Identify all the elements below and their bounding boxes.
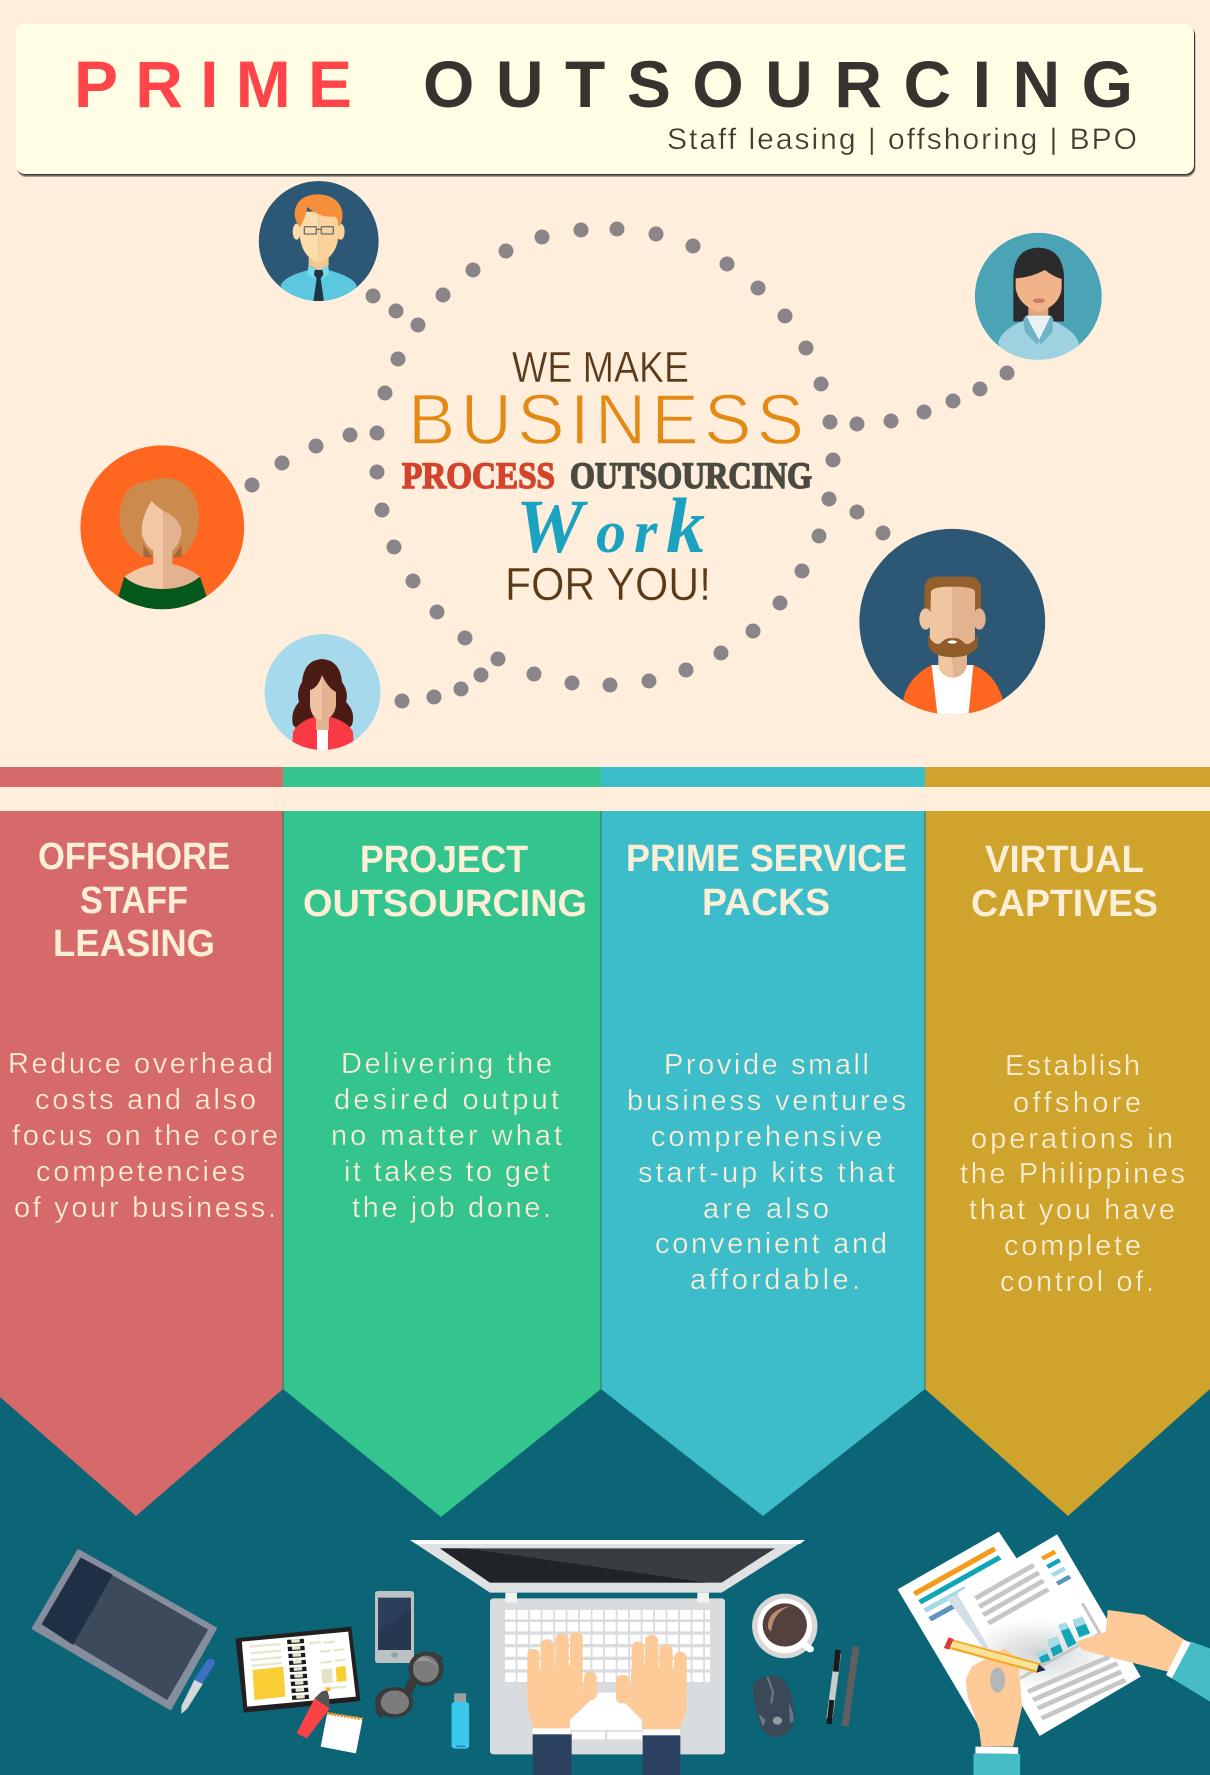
body: offshore staff leasing: competencies bbox=[36, 1156, 245, 1188]
column dividers bbox=[283, 811, 925, 1389]
slogan: work: k bbox=[666, 482, 705, 569]
subtitle: Staff leasing | offshoring | BPO bbox=[667, 123, 1137, 156]
heading: project outsourcing: PROJECT bbox=[360, 839, 528, 881]
avatar: woman top right bbox=[975, 233, 1102, 360]
body: prime service packs: comprehensive bbox=[651, 1121, 882, 1153]
body: prime service packs: start-up kits that bbox=[638, 1157, 895, 1189]
heading: offshore staff leasing: OFFSHORE bbox=[38, 836, 230, 878]
body: project outsourcing: no matter what bbox=[331, 1120, 562, 1152]
slogan: work: r bbox=[634, 499, 658, 565]
body: prime service packs: are also bbox=[703, 1193, 829, 1225]
body: virtual captives: control of. bbox=[1000, 1266, 1154, 1298]
slogan: work: W bbox=[516, 485, 589, 569]
slogan: we make: WE MAKE bbox=[512, 343, 689, 392]
body: virtual captives: offshore bbox=[1013, 1087, 1141, 1119]
body: prime service packs: affordable. bbox=[690, 1264, 860, 1296]
body: virtual captives: that you have bbox=[969, 1194, 1175, 1226]
body: project outsourcing: the job done. bbox=[352, 1192, 551, 1224]
right hand bbox=[616, 1635, 687, 1729]
body: prime service packs: convenient and bbox=[655, 1228, 887, 1260]
panel: project outsourcing bbox=[283, 811, 601, 1517]
body: virtual captives bbox=[960, 1050, 1185, 1298]
icon: paper front sheet with chart bbox=[957, 1534, 1141, 1736]
heading: offshore staff leasing: LEASING bbox=[53, 923, 215, 965]
icon: mouse bbox=[753, 1676, 795, 1737]
body: offshore staff leasing: focus on the core bbox=[12, 1120, 278, 1152]
icon: sunglasses bbox=[375, 1652, 443, 1718]
heading: offshore staff leasing: STAFF bbox=[80, 880, 188, 922]
body: project outsourcing: Delivering the bbox=[341, 1048, 552, 1080]
heading: virtual captives: CAPTIVES bbox=[971, 883, 1158, 925]
panel: prime service packs bbox=[601, 811, 925, 1516]
icon: marker bbox=[297, 1687, 331, 1738]
heading: virtual captives: VIRTUAL bbox=[985, 839, 1144, 881]
icon: notebook bbox=[235, 1627, 360, 1713]
body: offshore staff leasing: costs and also bbox=[35, 1084, 256, 1116]
icon: usb stick bbox=[452, 1693, 469, 1749]
heading: virtual captives bbox=[971, 839, 1158, 925]
heading: prime service packs: PACKS bbox=[702, 882, 830, 924]
colour band bbox=[0, 767, 1210, 787]
title bbox=[74, 47, 1133, 121]
icon: right hand holding paper bbox=[1077, 1610, 1210, 1702]
body: offshore staff leasing: Reduce overhead bbox=[8, 1048, 273, 1080]
left hand bbox=[527, 1632, 597, 1728]
teal desk background bbox=[0, 1380, 1210, 1775]
body: virtual captives: Establish bbox=[1005, 1050, 1140, 1082]
body: project outsourcing bbox=[331, 1048, 562, 1224]
heading: project outsourcing: OUTSOURCING bbox=[303, 883, 587, 925]
title: PRIME bbox=[74, 47, 352, 121]
laptop base bbox=[490, 1593, 725, 1754]
icon: sticky note bbox=[321, 1713, 363, 1753]
heading: project outsourcing bbox=[303, 839, 587, 925]
avatar: woman on orange bbox=[80, 445, 244, 615]
title: OUTSOURCING bbox=[423, 47, 1133, 121]
body: project outsourcing: it takes to get bbox=[344, 1156, 550, 1188]
slogan: for you: FOR YOU! bbox=[505, 558, 711, 610]
body: offshore staff leasing: of your business. bbox=[14, 1192, 276, 1224]
slogan: process outsourcing: OUTSOURCING bbox=[570, 456, 812, 497]
slogan: process outsourcing bbox=[402, 456, 812, 497]
icon: pen bbox=[181, 1663, 210, 1714]
icon: tablet bbox=[33, 1551, 215, 1709]
icon: phone bbox=[375, 1591, 414, 1663]
slogan: work: o bbox=[596, 499, 626, 565]
body: offshore staff leasing bbox=[8, 1048, 278, 1224]
dotted connector network bbox=[244, 222, 1014, 708]
panel: virtual captives bbox=[925, 811, 1210, 1516]
desk items left bbox=[33, 1551, 469, 1753]
body: virtual captives: operations in bbox=[971, 1123, 1173, 1155]
body: project outsourcing: desired output bbox=[334, 1084, 559, 1116]
desk items right bbox=[752, 1532, 1210, 1775]
avatar: man with glasses bbox=[259, 181, 379, 303]
icon: coffee cup bbox=[752, 1594, 817, 1658]
icon: paper back sheet bbox=[898, 1532, 1067, 1733]
body: prime service packs: business ventures bbox=[627, 1085, 906, 1117]
slogan: process outsourcing: PROCESS bbox=[402, 456, 555, 497]
body: prime service packs: Provide small bbox=[664, 1049, 869, 1081]
heading: prime service packs: PRIME SERVICE bbox=[626, 838, 907, 880]
heading: prime service packs bbox=[626, 838, 907, 924]
avatar: woman on light blue bbox=[264, 634, 380, 752]
panel: offshore staff leasing bbox=[0, 811, 283, 1516]
header panel bbox=[16, 24, 1196, 177]
centre slogan bbox=[402, 343, 812, 610]
icon: hand with pencil bbox=[946, 1643, 1046, 1775]
icon: pens bbox=[829, 1647, 856, 1726]
body: virtual captives: the Philippines bbox=[960, 1158, 1185, 1190]
laptop lid bbox=[410, 1540, 805, 1593]
heading: offshore staff leasing bbox=[38, 836, 230, 965]
body: virtual captives: complete bbox=[1004, 1230, 1141, 1262]
body: prime service packs bbox=[627, 1049, 906, 1296]
icon: laptop with hands bbox=[410, 1540, 805, 1775]
slogan: business: BUSINESS bbox=[408, 381, 804, 460]
avatar: bearded man bbox=[859, 529, 1045, 720]
sleeves bbox=[533, 1728, 680, 1775]
